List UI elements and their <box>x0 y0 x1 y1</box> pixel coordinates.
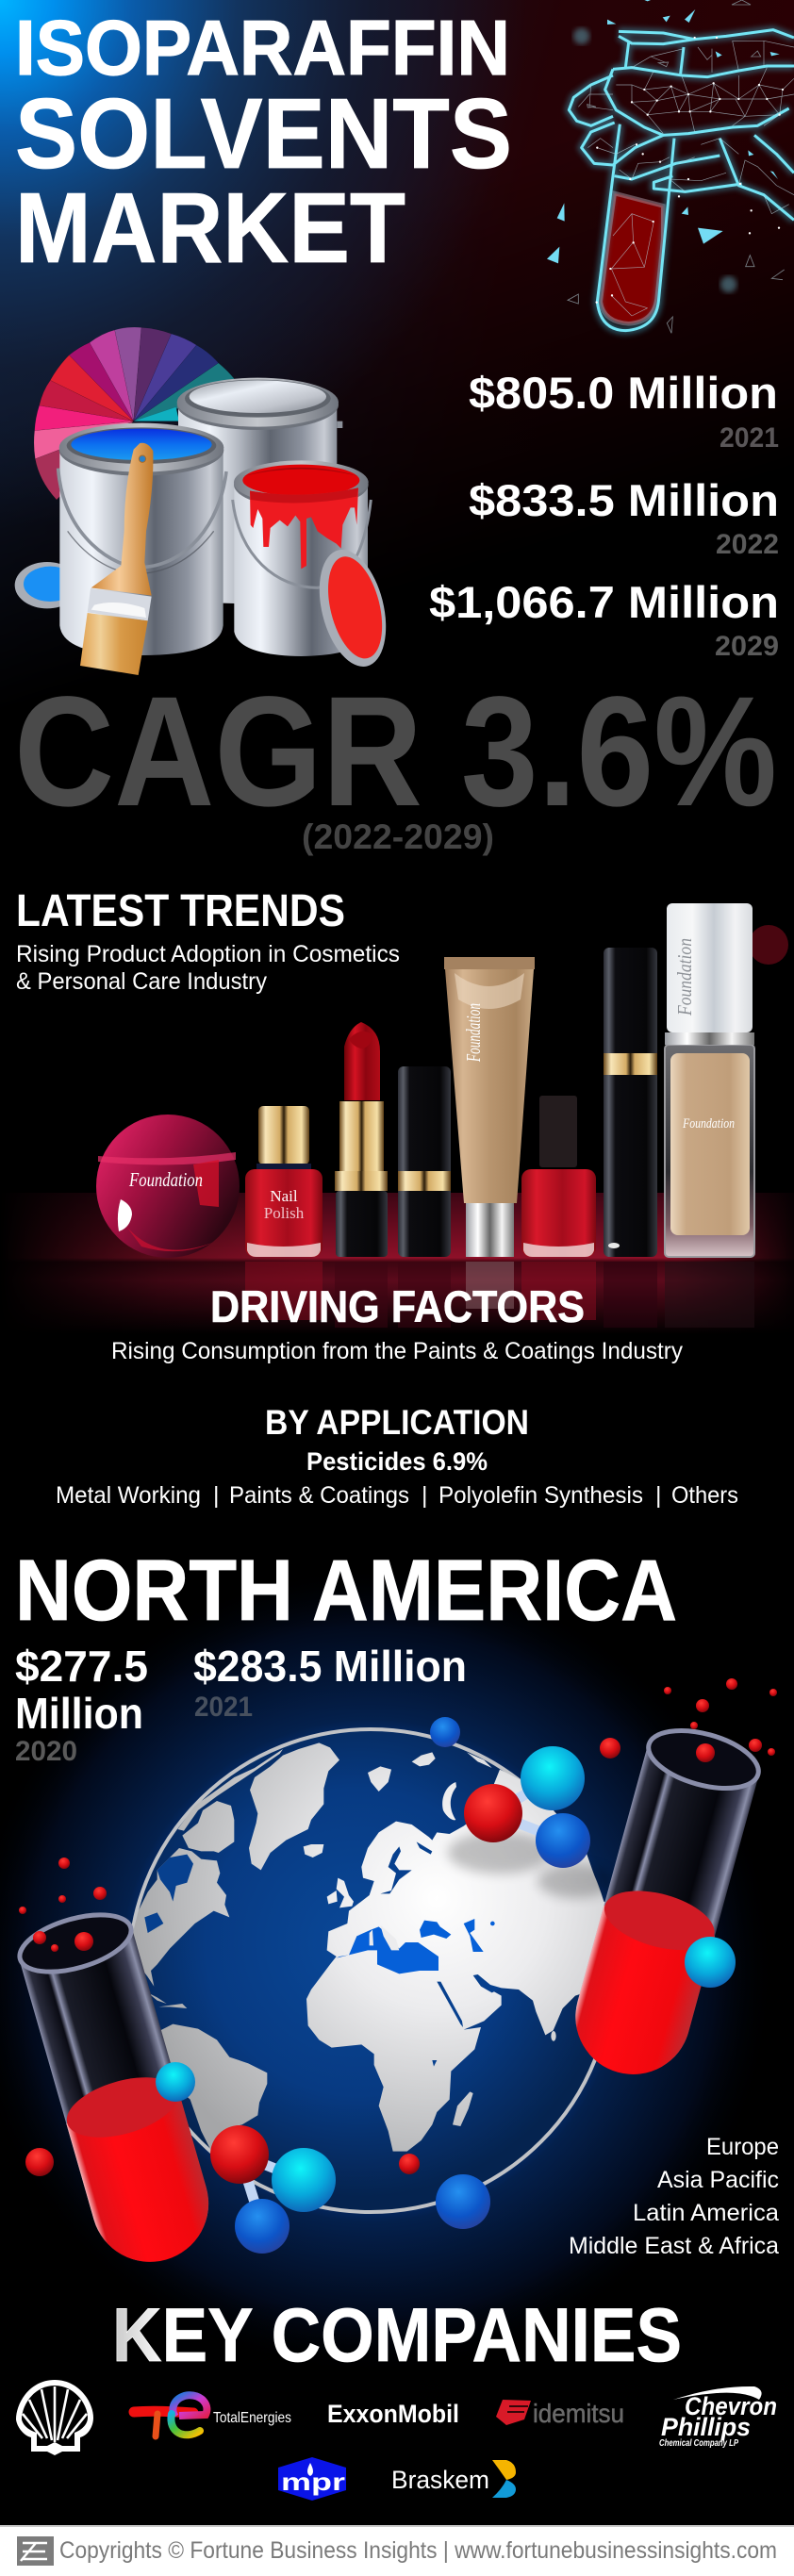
colour fan <box>34 327 234 500</box>
value 2021: $805.0 Million <box>469 368 778 418</box>
nail polish <box>245 1106 323 1257</box>
lipstick closed <box>398 1066 451 1257</box>
foundation bottle <box>665 903 754 1257</box>
by application: Paints & Coatings <box>229 1482 409 1509</box>
red lid <box>308 543 397 673</box>
logo: Braskem: Braskem <box>391 2466 489 2494</box>
icon: paint cans and brush <box>15 327 397 675</box>
north america heading: NORTH AMERICA <box>15 1543 677 1639</box>
Europe Asia Africa <box>306 1770 613 2152</box>
by application: Metal Working <box>56 1482 201 1509</box>
Italy and islands <box>370 1925 399 1950</box>
red paint can <box>233 460 371 656</box>
globe <box>0 1565 776 2376</box>
logo: Braskem <box>391 2460 516 2498</box>
logo: Chevron Phillips: Chemical Company LP <box>659 2438 738 2449</box>
perfume compact <box>96 1115 240 1258</box>
logo: Shell <box>16 2380 93 2455</box>
molecule top <box>430 1717 613 1898</box>
inland seas <box>144 1841 502 2067</box>
by application: | <box>213 1482 219 1509</box>
test tube left <box>12 1904 223 2276</box>
nail polish: Nail <box>270 1187 298 1205</box>
value 2021: 2021 <box>720 422 779 454</box>
icon: Fortune Business Insights logo <box>17 2536 54 2566</box>
key companies heading: KEY COMPANIES <box>112 2293 682 2378</box>
by application: | <box>422 1482 428 1509</box>
value 2022: 2022 <box>716 529 779 560</box>
north america 2021 value: $283.5 Million <box>193 1642 467 1691</box>
icon: wireframe hand holding test tube <box>547 0 794 333</box>
driving factors <box>111 1281 683 1364</box>
value 2029: 2029 <box>715 631 779 662</box>
North America <box>132 1848 229 1987</box>
by application: Others <box>671 1482 738 1509</box>
paint brush <box>80 443 153 675</box>
title: MARKET <box>15 173 405 284</box>
regions list: Middle East & Africa <box>569 2233 779 2259</box>
latest trends text: Rising Product Adoption in Cosmetics <box>16 941 400 967</box>
logo: Chevron Phillips: Chevron <box>685 2392 777 2420</box>
logo: MPR: mpr <box>281 2468 345 2496</box>
reflections <box>245 1262 754 1328</box>
page background <box>0 0 794 637</box>
logo: idemitsu: idemitsu <box>533 2399 624 2428</box>
north america 2021 value: 2021 <box>194 1692 253 1723</box>
by application <box>56 1403 738 1509</box>
blue paint can <box>58 423 226 655</box>
title: SOLVENTS <box>15 78 512 190</box>
market size values <box>429 368 779 662</box>
test tube right <box>562 1720 766 2088</box>
logo: TotalEnergies: TotalEnergies <box>213 2410 291 2426</box>
latest trends text: LATEST TRENDS <box>16 886 345 936</box>
north america 2020 value: Million <box>15 1689 143 1738</box>
latest trends text: & Personal Care Industry <box>16 968 267 995</box>
continents <box>132 1742 613 2152</box>
foundation tube <box>444 957 535 1257</box>
value 2029 <box>429 577 779 662</box>
north america 2020 value: 2020 <box>15 1736 77 1767</box>
by application: BY APPLICATION <box>265 1403 529 1442</box>
Greenland <box>249 1742 339 1870</box>
logo: Chevron Phillips <box>659 2386 777 2449</box>
north america 2020 value: $277.5 <box>15 1642 148 1691</box>
nail polish: Polish <box>264 1204 305 1222</box>
title <box>15 4 512 284</box>
logo: MPR <box>278 2457 346 2501</box>
lipstick open <box>335 1022 388 1257</box>
regions list: Latin America <box>633 2200 779 2226</box>
by application: | <box>655 1482 662 1509</box>
by application: Pesticides 6.9% <box>306 1447 488 1476</box>
north america 2020 value <box>15 1642 148 1767</box>
title: ISOPARAFFIN <box>15 4 510 91</box>
foundation tube: Foundation <box>462 1003 485 1063</box>
by application: Polyolefin Synthesis <box>438 1482 643 1509</box>
driving factors: DRIVING FACTORS <box>210 1281 585 1331</box>
South America <box>160 2024 267 2150</box>
logo: Chevron Phillips: Phillips <box>661 2413 751 2441</box>
red liquid in mesh tube <box>601 193 663 323</box>
cosmetics illustration <box>0 903 794 1334</box>
regions list: Europe <box>706 2134 779 2160</box>
value 2022 <box>469 475 779 560</box>
regions list: Asia Pacific <box>657 2167 779 2193</box>
regions list <box>569 2134 779 2259</box>
driving factors: Rising Consumption from the Paints & Coatings Industry <box>111 1338 683 1364</box>
blue paint saucer <box>15 562 79 608</box>
logo: idemitsu <box>496 2399 624 2428</box>
footer <box>0 2525 794 2576</box>
droplets right <box>600 1678 777 1762</box>
latest trends text <box>16 886 400 995</box>
molecule bottom <box>210 2125 490 2254</box>
logo: TotalEnergies <box>134 2395 291 2436</box>
nail polish black cap <box>521 1096 596 1257</box>
value 2029: $1,066.7 Million <box>429 577 779 627</box>
north america 2021 value <box>193 1642 467 1723</box>
silver can <box>177 378 342 603</box>
logo: ExxonMobil: ExxonMobil <box>327 2400 459 2428</box>
mascara <box>604 948 657 1257</box>
value 2021 <box>469 368 779 454</box>
foundation bottle: Foundation <box>682 1116 735 1131</box>
CAGR: (2022-2029) <box>302 817 494 856</box>
value 2022: $833.5 Million <box>469 475 779 525</box>
Arctic Canada <box>182 1801 234 1853</box>
perfume compact: Foundation <box>128 1168 203 1191</box>
foundation bottle: Foundation <box>673 938 696 1016</box>
droplets left <box>19 1858 420 2176</box>
